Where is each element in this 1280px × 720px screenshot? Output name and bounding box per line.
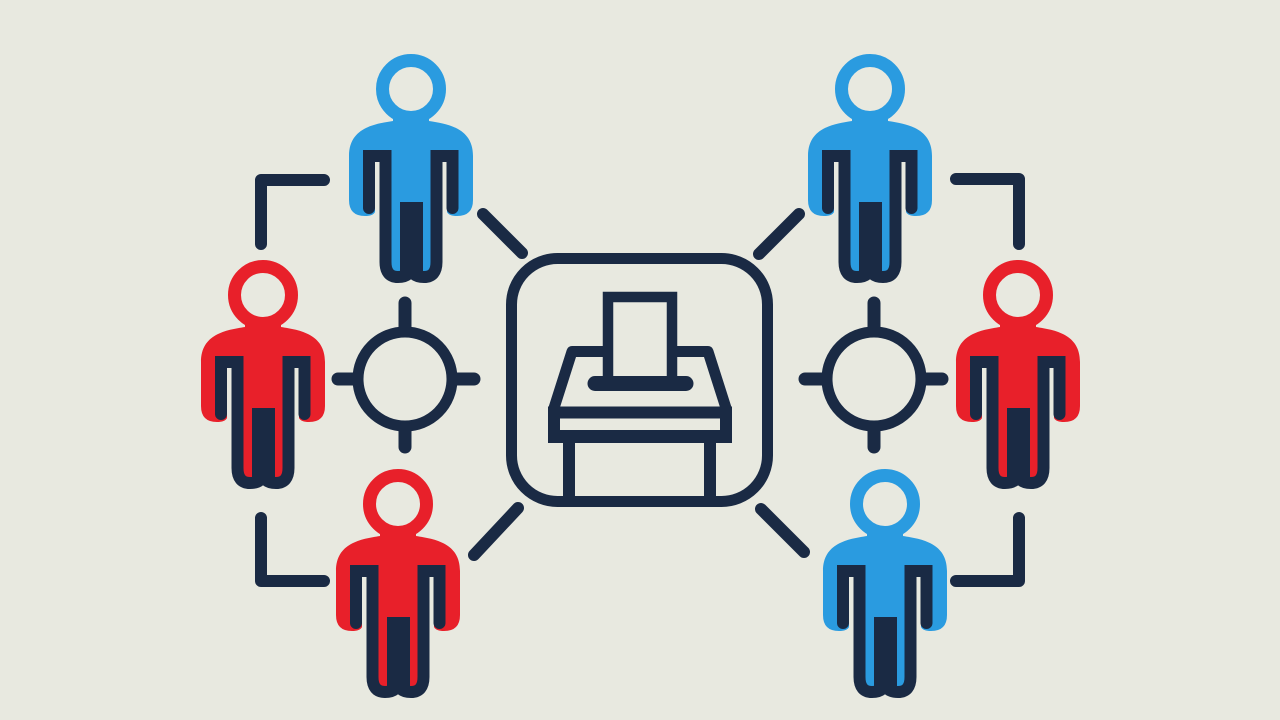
- box lid: [554, 352, 726, 408]
- box lower band thickening: [548, 430, 732, 443]
- person: red bottom left: [336, 476, 460, 692]
- icon: ballot box in rounded frame: [512, 258, 768, 502]
- person: blue top left: [349, 60, 473, 277]
- bracket: bottom right: [956, 518, 1019, 581]
- box legs: [569, 440, 710, 500]
- connector: bottom left to ballot box: [474, 508, 518, 555]
- icon frame: [512, 258, 768, 502]
- person: blue top right: [808, 60, 932, 277]
- box band: [554, 412, 726, 436]
- person: red middle right: [956, 266, 1080, 483]
- person: blue bottom right: [823, 476, 947, 692]
- connector: bottom right to ballot box: [761, 509, 804, 552]
- crosshair: right: [805, 303, 942, 447]
- bracket: top left: [261, 180, 324, 244]
- ballot paper: [608, 297, 672, 380]
- bracket: top right: [956, 179, 1019, 244]
- ballot slot: [595, 376, 686, 391]
- person: red middle left: [201, 266, 325, 483]
- bracket: bottom left: [261, 518, 324, 581]
- connector: top right to ballot box: [759, 214, 799, 254]
- crosshair: left: [338, 303, 474, 447]
- connector: top left to ballot box: [483, 214, 522, 253]
